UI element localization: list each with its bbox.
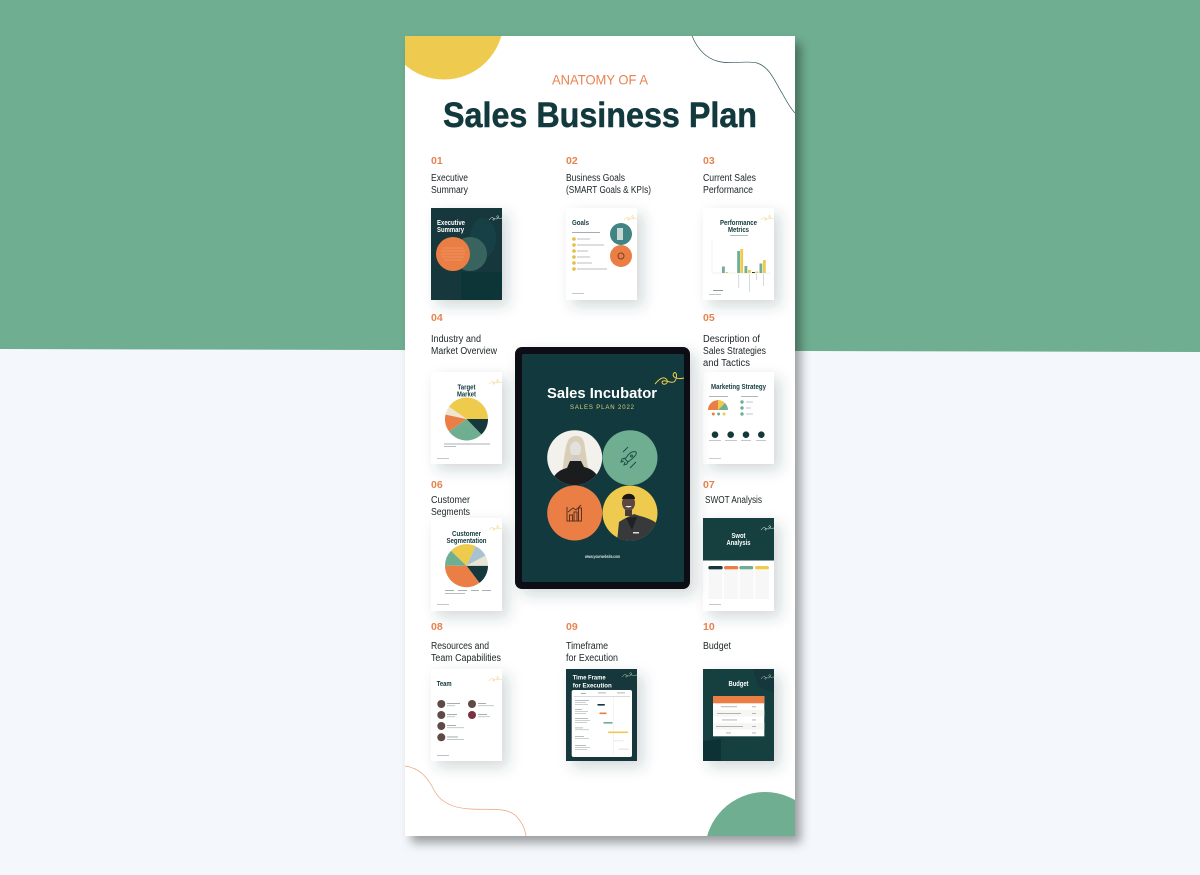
thumbnail: team <box>431 669 502 761</box>
thumbnail: goals: Goals <box>572 218 589 227</box>
thumbnail: team: Team <box>437 679 452 688</box>
section 07 label: SWOT Analysis <box>705 495 762 506</box>
thumbnail: performance metrics: Metrics <box>728 227 749 234</box>
section 08 label <box>431 621 501 664</box>
thumbnail: executive summary: Executive <box>437 220 465 227</box>
eyebrow heading: ANATOMY OF A <box>552 72 649 88</box>
thumbnail: customer segmentation: Customer <box>452 531 481 538</box>
section 03 label <box>703 155 756 196</box>
thumbnail: time frame: Time Frame <box>573 674 606 682</box>
section 01 label: Executive <box>431 173 468 184</box>
thumbnail: swot analysis <box>703 518 774 611</box>
thumbnail: budget: Budget <box>728 679 749 688</box>
circle: rocket icon <box>602 430 658 485</box>
section 07 label <box>703 479 762 506</box>
thumbnail: marketing strategy: Marketing Strategy <box>711 384 766 391</box>
thumbnail: executive summary: Summary <box>437 227 464 234</box>
thumbnail: target market: Market <box>457 392 477 398</box>
section 01 label: 01 <box>431 155 443 167</box>
section 08 label: 08 <box>431 621 443 633</box>
bottom left squiggle <box>405 766 526 836</box>
section 05 label: 05 <box>703 312 715 324</box>
green corner circle <box>707 792 795 836</box>
section 06 label: Segments <box>431 507 470 518</box>
budget table <box>713 696 764 736</box>
section 10 label <box>703 621 731 652</box>
section 03 label: Performance <box>703 185 753 196</box>
section 04 label <box>431 312 498 357</box>
tablet <box>515 347 690 589</box>
section 04 label: Industry and <box>431 334 481 345</box>
section 01 label <box>431 155 468 196</box>
section 07 label: 07 <box>703 479 715 491</box>
section 04 label: Market Overview <box>431 346 498 357</box>
tablet screen <box>522 354 684 582</box>
section 05 label: Description of <box>703 334 760 345</box>
section 02 label: Business Goals <box>566 173 625 184</box>
photo: man <box>602 485 660 542</box>
section 09 label: 09 <box>566 621 578 633</box>
tablet subtitle: SALES PLAN 2022 <box>570 405 635 411</box>
thumbnail: goals <box>566 208 637 300</box>
section 05 label: and Tactics <box>703 358 750 369</box>
thumbnail: time frame: for Execution <box>573 682 612 690</box>
section 05 label <box>703 312 766 369</box>
section 09 label <box>566 621 618 664</box>
section 10 label: Budget <box>703 641 731 652</box>
section 06 label <box>431 479 471 518</box>
section 04 label: 04 <box>431 312 443 324</box>
main title: Sales Business Plan <box>443 96 757 135</box>
thumbnail: target market <box>431 372 502 464</box>
thumbnail: budget <box>703 669 774 761</box>
top right squiggle <box>692 36 795 113</box>
section 03 label: Current Sales <box>703 173 756 184</box>
tablet title: Sales Incubator <box>547 386 657 402</box>
thumbnail: performance metrics <box>703 208 774 300</box>
thumbnail: time frame <box>566 669 637 761</box>
section 03 label: 03 <box>703 155 715 167</box>
section 02 label: (SMART Goals & KPIs) <box>566 185 651 196</box>
poster card <box>404 36 808 850</box>
half pie <box>708 400 728 410</box>
thumbnail: swot analysis: Analysis <box>726 540 751 547</box>
photo: woman <box>547 430 603 490</box>
section 05 label: Sales Strategies <box>703 346 766 357</box>
section 09 label: Timeframe <box>566 641 608 652</box>
thumbnail: swot analysis: Swot <box>732 533 746 540</box>
section 08 label: Resources and <box>431 641 489 652</box>
pie chart <box>445 398 488 440</box>
thumbnail: target market: Target <box>458 384 476 392</box>
thumbnail: performance metrics: Performance <box>720 220 757 227</box>
thumbnail: customer segmentation: Segmentation <box>446 538 486 545</box>
pie chart <box>445 544 488 587</box>
thumbnail: marketing strategy <box>703 372 774 464</box>
tablet url: www.yourwebsite.com <box>584 554 620 559</box>
section 10 label: 10 <box>703 621 715 633</box>
circle: chart icon <box>547 486 602 540</box>
section 09 label: for Execution <box>566 653 618 664</box>
yellow corner circle <box>405 36 502 80</box>
section 02 label <box>566 155 651 196</box>
thumbnail: executive summary <box>431 208 502 300</box>
section 06 label: Customer <box>431 495 471 506</box>
bars <box>722 249 766 292</box>
section 01 label: Summary <box>431 185 468 196</box>
scribble <box>655 373 684 384</box>
section 02 label: 02 <box>566 155 578 167</box>
section 08 label: Team Capabilities <box>431 653 501 664</box>
thumbnail: customer segmentation <box>431 518 502 611</box>
background: green upper band <box>0 0 1200 352</box>
section 06 label: 06 <box>431 479 443 491</box>
